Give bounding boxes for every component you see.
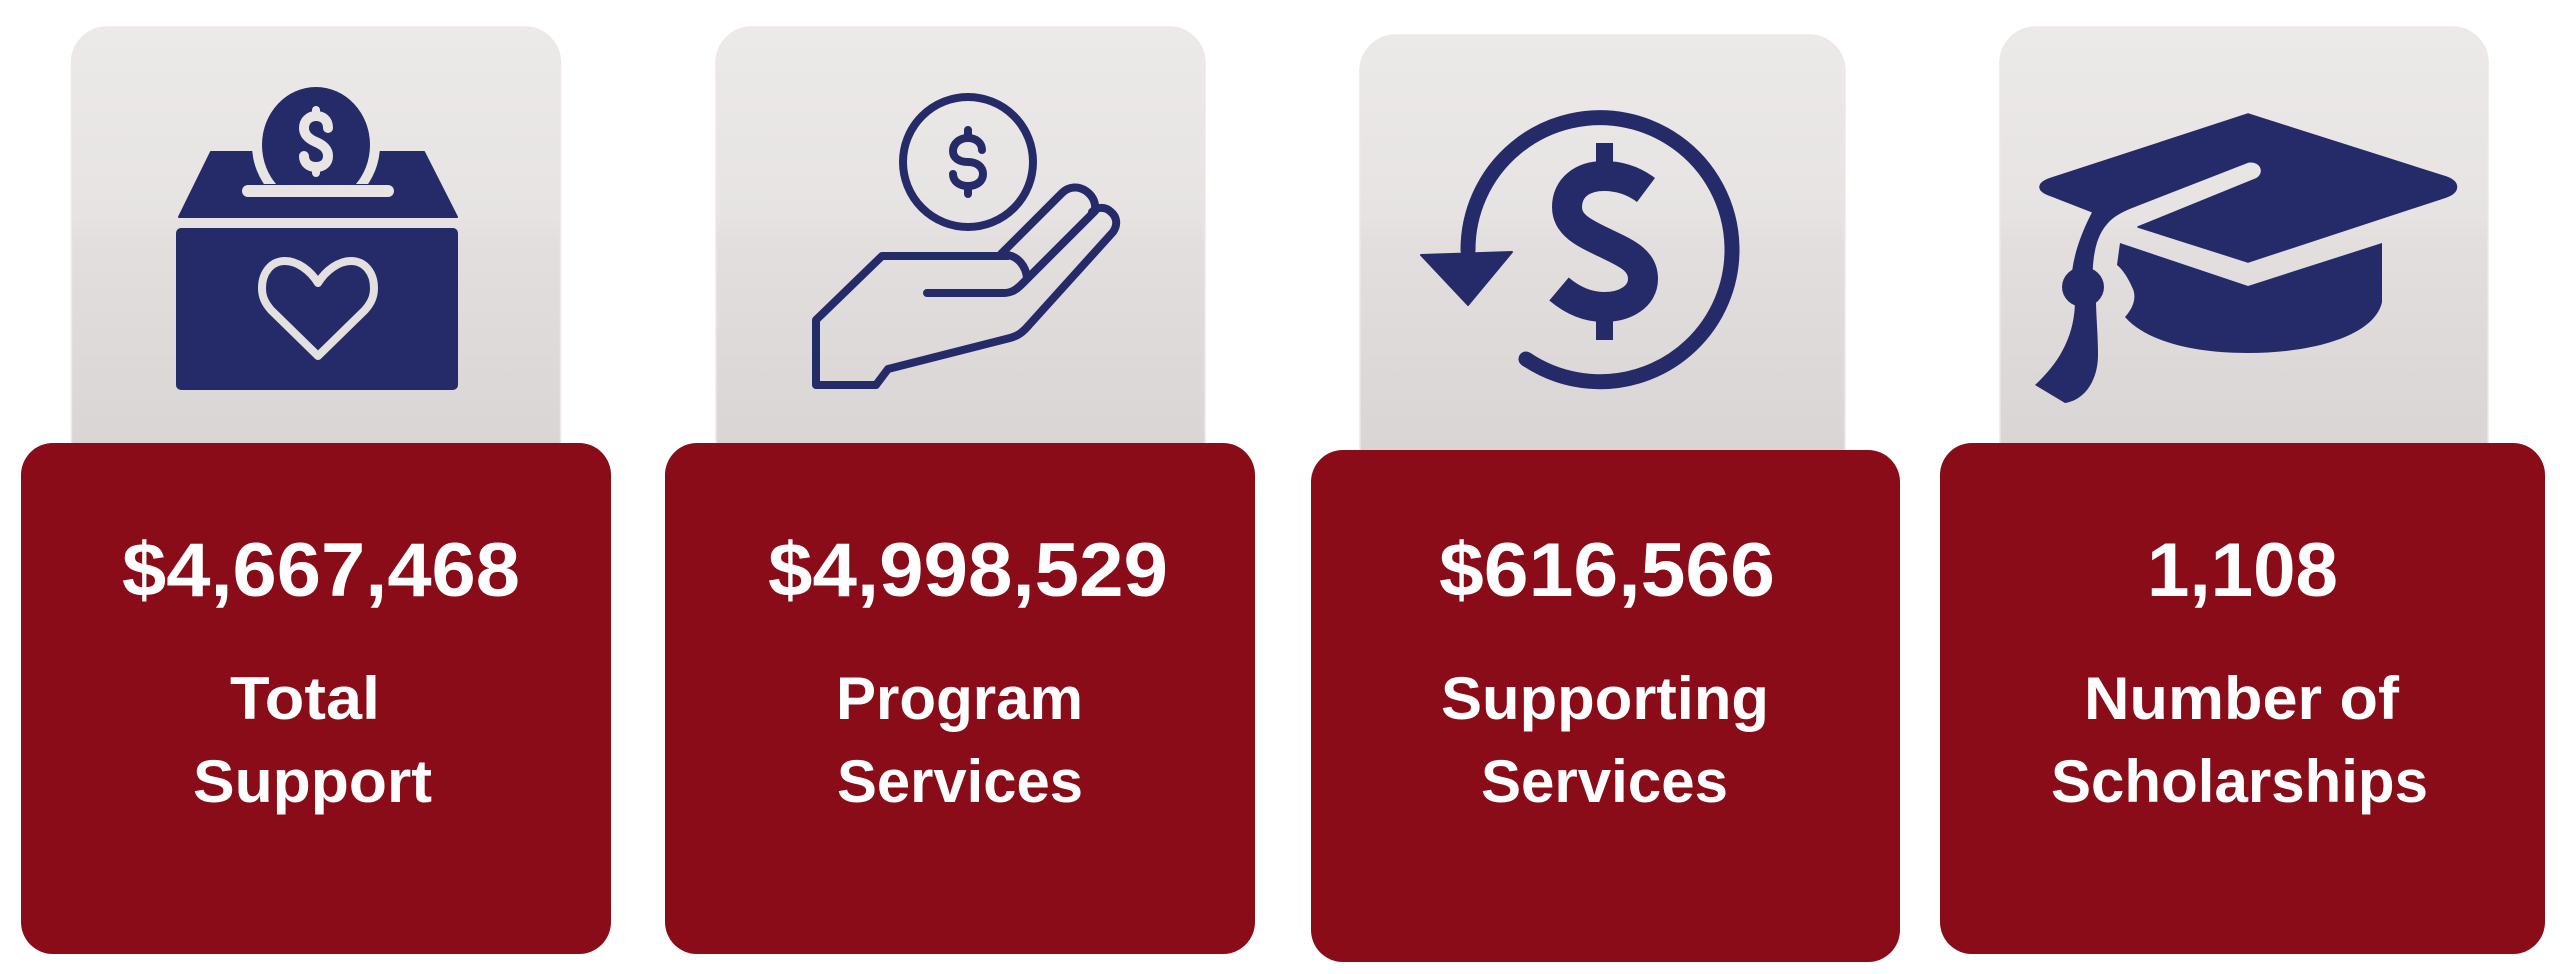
label line 2: Services	[837, 748, 1083, 815]
icon panel: program services	[716, 27, 1205, 507]
card: number of scholarships	[1940, 27, 2545, 954]
label line 1: Total	[230, 665, 380, 732]
stat panel: number of scholarships	[1940, 443, 2545, 954]
stat panel: program services	[665, 443, 1255, 954]
stat panel: supporting services	[1311, 450, 1900, 962]
icon panel: total support	[72, 27, 560, 507]
stat panel: total support	[21, 443, 611, 954]
icon: graduation cap	[2035, 114, 2456, 403]
icon: dollar with circular arrow	[1421, 118, 1732, 382]
label line 2: Support	[193, 748, 432, 815]
icon panel: number of scholarships	[2000, 27, 2488, 507]
value: $4,998,529	[768, 528, 1168, 613]
icon: donation box with coin and heart	[176, 78, 458, 390]
value: $4,667,468	[122, 528, 520, 613]
value: $616,566	[1439, 528, 1775, 613]
icon: hand holding coin	[816, 97, 1116, 385]
card: total support	[21, 27, 611, 954]
card: program services	[665, 27, 1255, 954]
value: 1,108	[2147, 528, 2338, 613]
icon panel: supporting services	[1360, 35, 1845, 515]
label line 1: Number of	[2084, 665, 2400, 732]
card: supporting services	[1311, 35, 1900, 962]
label line 1: Supporting	[1441, 665, 1769, 732]
label line 2: Services	[1481, 748, 1728, 815]
label line 2: Scholarships	[2051, 748, 2428, 815]
label line 1: Program	[836, 665, 1083, 732]
